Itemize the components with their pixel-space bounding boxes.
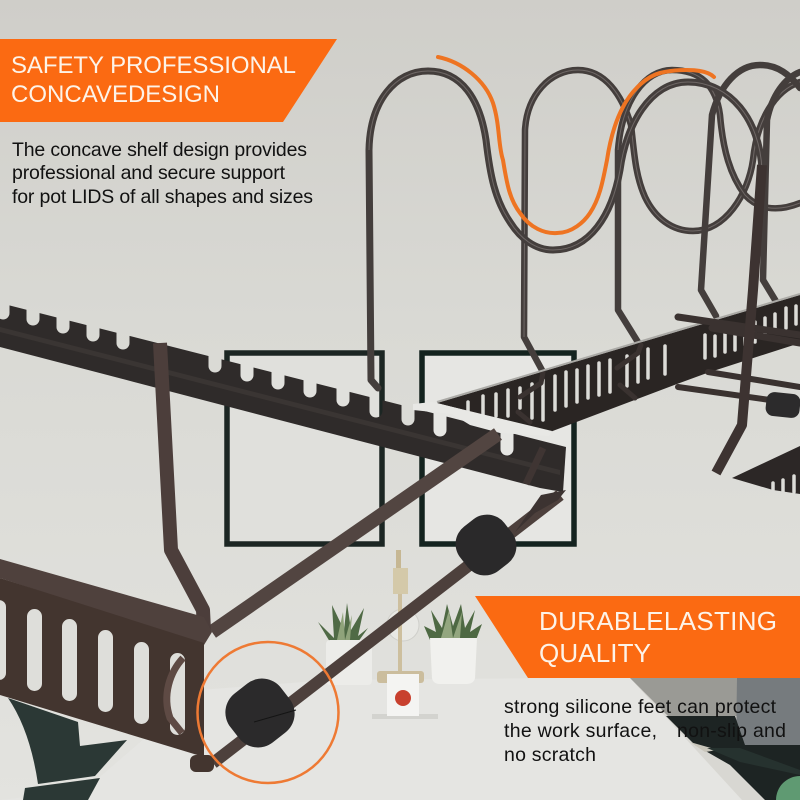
text block: silicone feet description: non-slip and: [677, 720, 786, 742]
text block: concave shelf description: for pot LIDS of all shapes and sizes: [12, 186, 313, 208]
text block: concave shelf description: professional and secure support: [12, 162, 286, 184]
left toothed shelf: [0, 303, 566, 492]
orange concave guide curve: [438, 57, 714, 233]
plant in white pot, left: [318, 603, 372, 685]
small shelf lower right: [732, 446, 800, 494]
back rod to foot: [213, 495, 560, 763]
rubber foot on rod, far end: [447, 506, 525, 584]
background: table top: [0, 676, 800, 800]
orange highlight circle: [198, 642, 338, 783]
heading: concave design: CONCAVEDESIGN: [11, 81, 220, 108]
connector at shelf right end: [515, 490, 566, 532]
desk lamp: [377, 550, 424, 683]
socket cube: [372, 674, 438, 719]
vertical leg wire: [160, 343, 204, 630]
panel: top orange heading banner: [0, 39, 337, 122]
heading: quality: QUALITY: [539, 638, 651, 668]
upper rod: [212, 434, 498, 632]
shelf edge highlight strip: [413, 402, 552, 436]
wheel behind shelf: [8, 698, 127, 800]
text block: silicone feet description: the work surface,: [504, 720, 657, 742]
text block: silicone feet description: strong silicone feet can protect: [504, 696, 777, 718]
text block: concave shelf description: The concave shelf design provides: [12, 139, 307, 161]
side rods right: [678, 317, 800, 400]
heading: durable lasting: DURABLELASTING: [539, 606, 777, 636]
rubber foot right: [765, 391, 800, 419]
front slotted bracket: [0, 559, 214, 772]
wire hooks on right shelf: [518, 345, 641, 422]
wall frame left: [227, 353, 382, 544]
text block: silicone feet description: no scratch: [504, 744, 596, 766]
heading: safety professional: SAFETY PROFESSIONAL: [11, 52, 296, 79]
main concave wire: [369, 71, 762, 473]
background: chair and dark scene, bottom right: [630, 678, 800, 800]
bolt on shelf end: [526, 448, 543, 484]
rubber silicone foot: [216, 669, 304, 757]
wire rods: rear dividers: [524, 65, 800, 372]
panel: bottom orange heading banner: [475, 596, 800, 678]
wall frame right: [422, 353, 574, 544]
left shelf fold highlight: [0, 327, 560, 475]
plant in white pot, right: [424, 604, 482, 684]
shelf upper light edge: [437, 294, 800, 402]
right slotted shelf: [437, 295, 800, 432]
